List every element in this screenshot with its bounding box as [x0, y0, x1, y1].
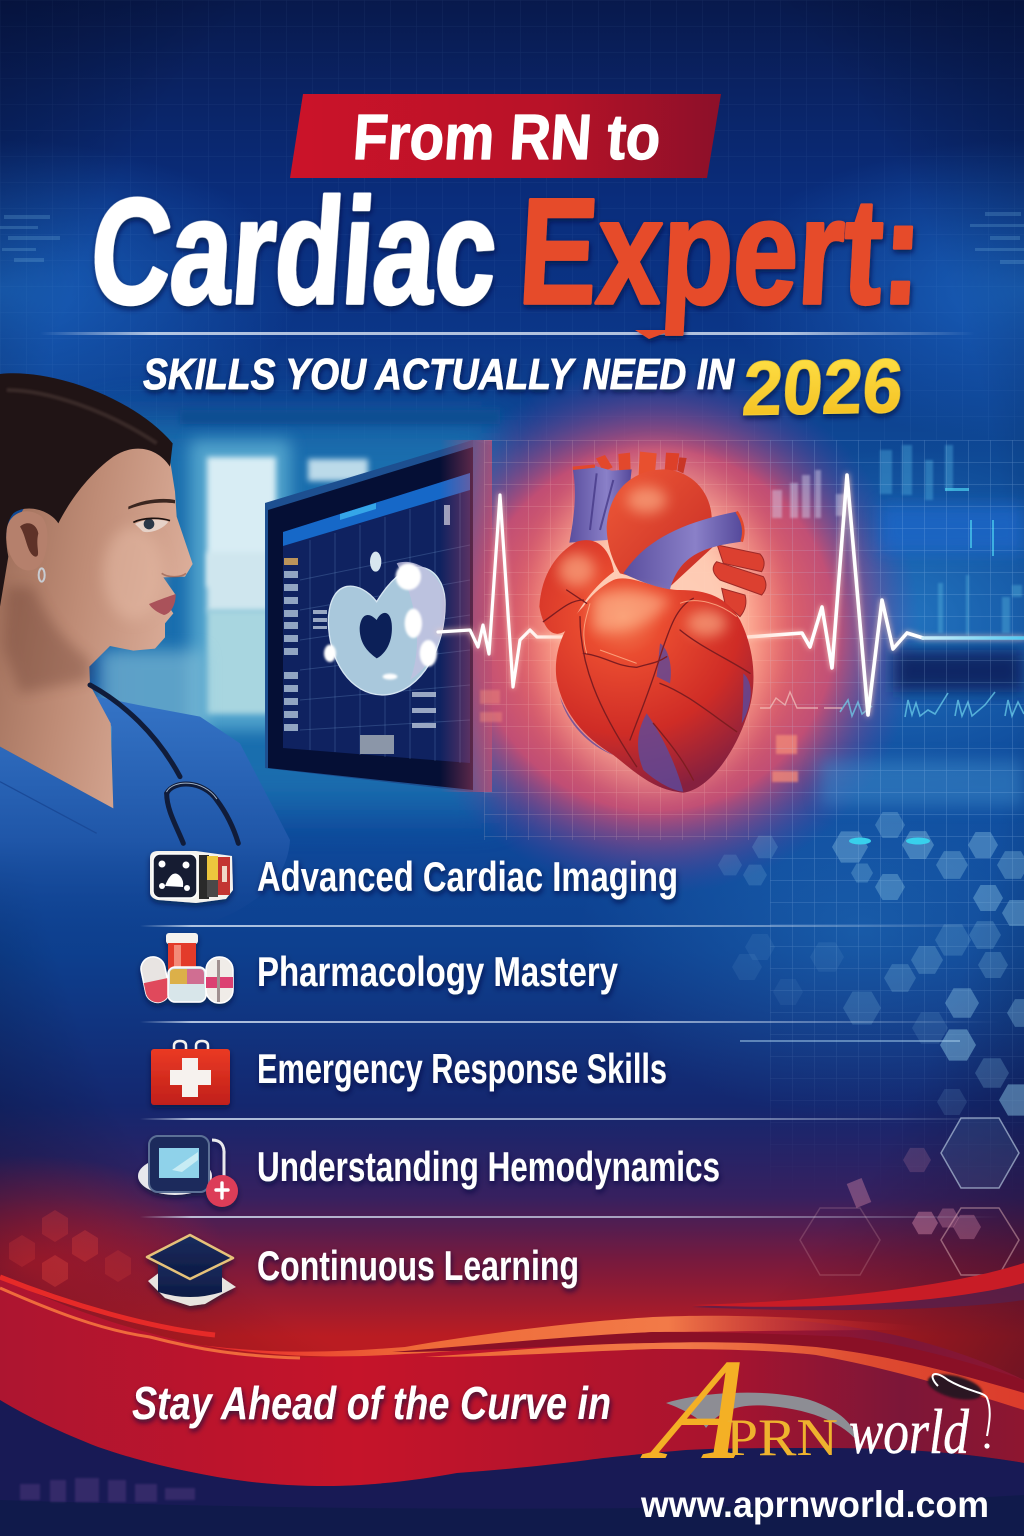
logo: world: world — [849, 1396, 970, 1467]
nurse: collar seam — [0, 782, 97, 833]
skill: Pharmacology Mastery: Pharmacology Mastery — [257, 948, 618, 995]
footer tagline: Stay Ahead of the Curve in — [132, 1377, 611, 1429]
icon: hemodynamic monitor — [138, 1136, 238, 1207]
APRN world logo — [629, 1329, 990, 1490]
nurse: hair — [0, 373, 173, 607]
heart: pulmonary artery — [623, 512, 743, 589]
heart glow backdrop — [390, 365, 920, 895]
skill: Understanding Hemodynamics: Understanding Hemodynamics — [257, 1143, 720, 1190]
heart: shaded purple muscle — [560, 643, 751, 792]
hexagon pattern — [718, 812, 1024, 1116]
skill list dividers — [140, 925, 1000, 1218]
headline divider — [40, 332, 975, 335]
skill: Advanced Cardiac Imaging: Advanced Cardiac Imaging — [257, 853, 678, 900]
stethoscope — [90, 685, 238, 843]
heart: ventricles — [556, 578, 753, 793]
ECG trace — [438, 475, 1024, 715]
logo: grey swoosh — [666, 1393, 858, 1442]
heart: aortic arch — [607, 469, 713, 587]
heart: right vessels — [713, 545, 766, 617]
heart: highlights — [558, 487, 727, 637]
heart: coronary vessels — [543, 590, 750, 780]
blurred clinic window background — [100, 410, 500, 810]
cyan sparkles in hexagons — [849, 838, 930, 844]
skill: Continuous Learning: Continuous Learning — [257, 1242, 579, 1289]
thin rule near hexagons — [740, 1040, 960, 1042]
illustration: patient monitor with cardiac scan — [265, 440, 492, 792]
nurse: earring — [39, 568, 45, 582]
headline: Cardiac: Cardiac — [86, 167, 502, 335]
title line one: From RN to — [351, 101, 663, 173]
nurse: ear — [6, 511, 47, 570]
subtitle: SKILLS YOU ACTUALLY NEED IN — [143, 350, 735, 399]
wireframe hexagons — [800, 1118, 1019, 1275]
red hex pattern — [9, 1210, 131, 1287]
icon: medication bottles and pills — [139, 933, 233, 1005]
heart: left atrium — [539, 540, 614, 634]
nurse: cheek light — [103, 527, 163, 620]
icon: graduation cap — [147, 1235, 236, 1306]
logo: flourish — [933, 1374, 990, 1436]
footer red wave band — [0, 1263, 1024, 1536]
nurse: skin of face and neck — [0, 443, 193, 808]
nurse: eye and brow — [128, 499, 175, 532]
nurse figure — [0, 373, 290, 960]
logo: PRN: PRN — [726, 1409, 838, 1467]
nurse: nose shadow — [162, 573, 186, 577]
logo: dark mark behind world — [925, 1370, 985, 1404]
skill: Emergency Response Skills: Emergency Response Skills — [257, 1045, 667, 1092]
right-side data chart overlay — [480, 445, 1024, 806]
title banner — [290, 94, 721, 178]
blue grid overlay — [484, 440, 1024, 1200]
heart halo — [520, 440, 790, 810]
icon: first-aid kit — [151, 1041, 230, 1105]
illustration: anatomical heart — [539, 452, 766, 793]
digital noise panels — [0, 212, 1024, 264]
year 2026: 2026 — [740, 343, 906, 432]
nurse: lips — [149, 594, 176, 615]
logo: script A: A — [629, 1329, 777, 1490]
pink hexagon blobs — [847, 1148, 981, 1239]
nurse: scrubs — [0, 696, 290, 960]
heart: great vessels — [569, 452, 687, 543]
website URL: www.aprnworld.com — [640, 1484, 989, 1525]
nurse: hair highlight — [7, 390, 157, 443]
nurse: jaw and neck shadow — [3, 587, 90, 693]
icon: cardiac imaging machine — [150, 851, 233, 903]
